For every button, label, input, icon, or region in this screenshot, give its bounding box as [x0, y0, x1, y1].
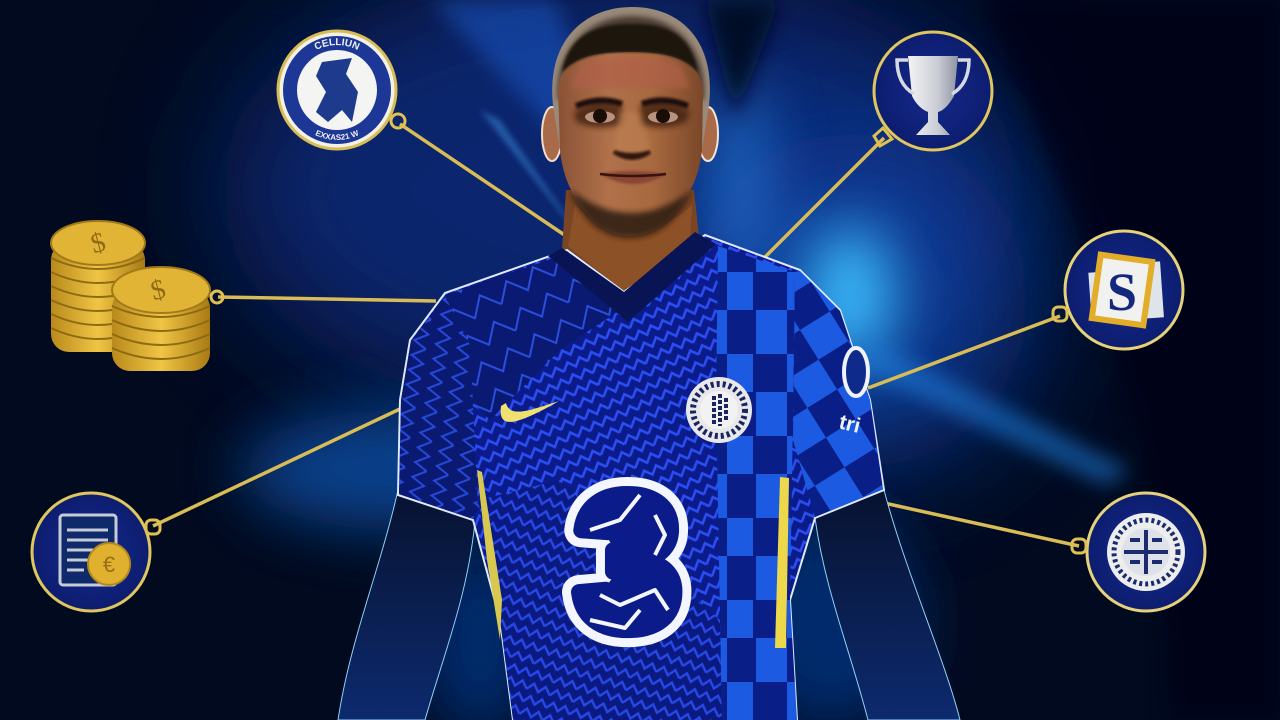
head fade: [552, 7, 710, 150]
icon: contract and coin: €: [103, 552, 115, 577]
neck: [562, 190, 700, 296]
icon: photo cards: [1053, 231, 1183, 349]
icon: stacked coins: [51, 221, 223, 371]
sponsor number: 3: [575, 454, 681, 669]
eyes: [585, 109, 678, 123]
swoosh: [501, 401, 559, 422]
brows: [576, 100, 622, 106]
connector lines: [153, 124, 1079, 546]
icon: club crest: CELLIUN: [314, 38, 360, 50]
icon: club crest: [276, 30, 406, 150]
lower jersey pattern: [478, 480, 722, 720]
sponsor number: 3: [575, 454, 681, 669]
mouth: [600, 171, 666, 184]
left sleeve pattern: [399, 296, 478, 519]
icon: trophy: [874, 32, 992, 150]
icon: club crest: EXXAS21 W: [315, 130, 358, 140]
yellow trim: [775, 477, 789, 648]
checker sleeve: [793, 271, 883, 517]
sleeve badge: [844, 348, 868, 396]
sponsor logo lightning marks: [590, 495, 668, 628]
eye shadows: [574, 100, 622, 128]
nose: [612, 112, 652, 160]
beard shadow: [570, 190, 692, 238]
icon: stacked coins: $: [147, 274, 169, 307]
checker panel: [716, 246, 797, 720]
icon: seal: [1072, 493, 1205, 611]
hair: [562, 24, 698, 72]
icon: contract and coin: [32, 493, 160, 611]
icon: photo cards: S: [1107, 262, 1137, 322]
icon: stacked coins: $: [87, 227, 109, 260]
upper chest pattern: [445, 256, 620, 420]
collar: [548, 232, 716, 322]
sleeve text: tri: [837, 411, 863, 438]
forehead highlight: [570, 56, 690, 88]
player: [338, 7, 960, 720]
ears: [542, 107, 562, 161]
jersey body: [398, 235, 884, 720]
arms: [338, 490, 476, 720]
jersey crest: [686, 377, 752, 443]
face: [558, 52, 703, 236]
